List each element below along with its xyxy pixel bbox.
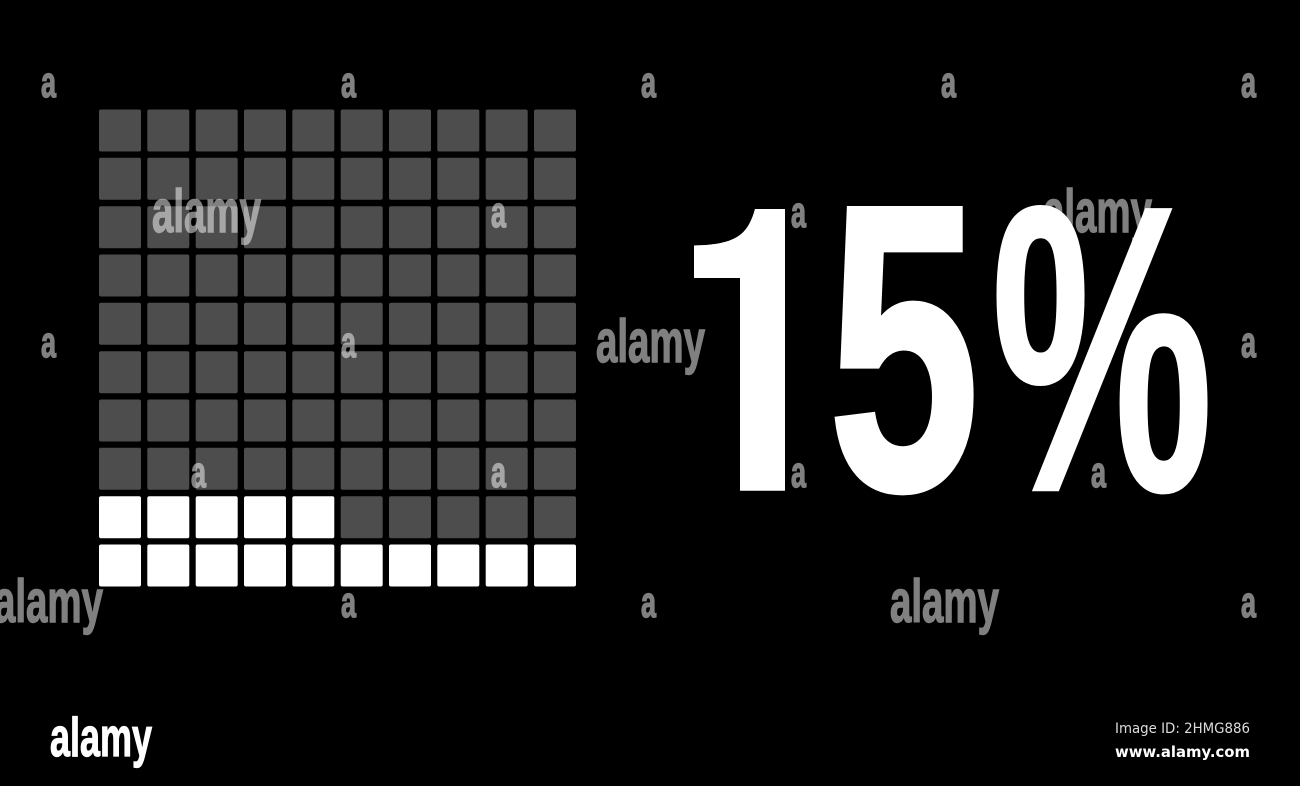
watermarks: a [791,188,806,237]
watermarks: a [1241,578,1256,627]
watermarks: a [41,58,56,107]
watermarks: a [1241,58,1256,107]
watermarks: a [491,188,506,237]
percentage value 15%: 5 [828,120,980,576]
watermarks: alamy [1043,178,1152,245]
watermarks: a [41,318,56,367]
watermarks: alamy [890,568,999,635]
percentage value 15%: % [991,121,1213,577]
watermarks [0,58,1256,635]
watermarks: alamy [596,308,705,375]
waffle chart: filled white cells [99,496,576,586]
website: www.alamy.com [1115,743,1250,761]
watermarks: a [341,58,356,107]
watermarks: a [491,448,506,497]
watermarks: a [1091,448,1106,497]
watermarks: a [191,448,206,497]
watermarks: a [641,58,656,107]
alamy logo: alamy [50,706,152,768]
percentage value 15% [694,205,1208,496]
watermarks: a [341,578,356,627]
waffle chart: unfilled grey cells [99,110,576,538]
percentage value 15%: 1 [601,119,875,577]
watermarks: a [941,58,956,107]
watermarks: a [341,318,356,367]
watermarks: alamy [152,178,261,245]
watermarks: a [791,448,806,497]
image id: Image ID: 2HMG886 [1115,721,1250,737]
watermarks: a [1241,318,1256,367]
watermarks: a [641,578,656,627]
